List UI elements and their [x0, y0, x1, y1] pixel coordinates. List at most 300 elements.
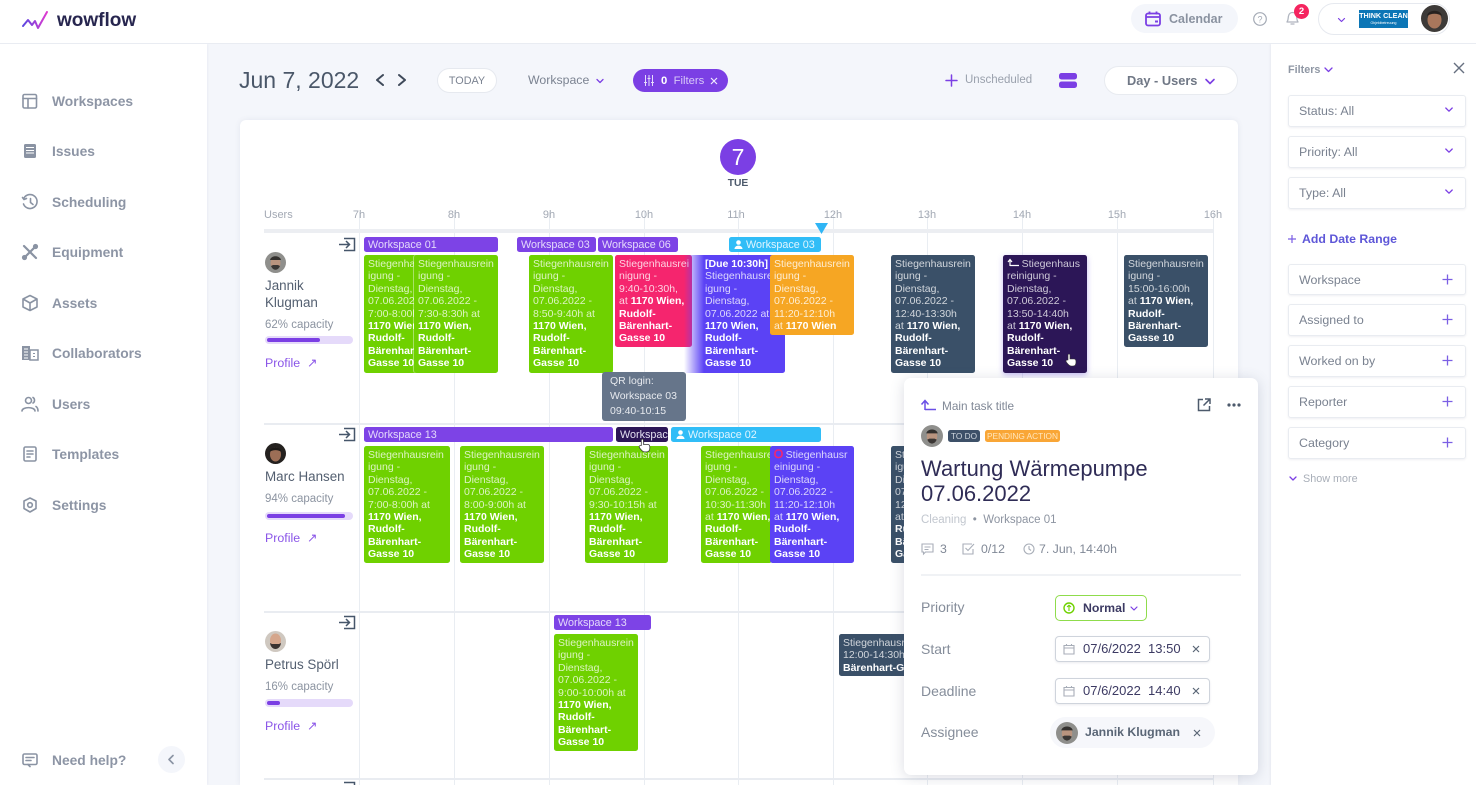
task: blue due 10:30: Rudolf- — [705, 332, 742, 344]
nav item: Settings — [23, 497, 106, 513]
task: green 8:00: Stiegenhausrein — [464, 449, 540, 461]
task: pink 9:40 — [615, 255, 692, 347]
capacity: 62% capacity — [265, 319, 333, 331]
icon: parent task — [920, 399, 936, 411]
filter: category: Category — [1299, 436, 1349, 450]
tag: Workspace 01: Workspace 01 — [368, 239, 437, 251]
icon: sliders — [644, 75, 654, 86]
icon: plus — [945, 74, 958, 87]
task: selected 13:50: at 1170 Wien, — [1007, 320, 1072, 332]
nav item: Assets — [22, 294, 97, 312]
task: slate 12:40: igung - — [895, 270, 927, 282]
nav item: Collaborators: Collaborators — [52, 346, 142, 361]
task: green 10:30: igung - — [705, 461, 737, 473]
task title: Wartung Wärmepumpe — [921, 456, 1148, 481]
filter: reporter: Reporter — [1299, 395, 1347, 409]
panel: filters sidebar — [1271, 44, 1476, 785]
task: green 7:00: Stiegenhausrein — [368, 449, 444, 461]
task: blue 11:20: Bärenhart- — [774, 536, 827, 548]
icon: checklist — [962, 543, 975, 555]
capacity: 16% capacity — [265, 681, 333, 693]
icon: clear — [710, 78, 718, 84]
task: green 8:00: Bärenhart- — [464, 536, 517, 548]
collapse button — [158, 746, 185, 773]
priority selector: Normal — [1083, 601, 1125, 615]
icon: help — [1253, 12, 1267, 26]
icon: check in — [339, 428, 356, 442]
task: green 9:00: Gasse 10 — [558, 736, 604, 748]
capacity: 94% capacity — [265, 493, 333, 505]
user: Marc Hansen — [265, 443, 353, 545]
tag: Workspace 01 — [364, 237, 498, 252]
nav item: Templates — [23, 446, 119, 462]
sidebar navigation — [0, 44, 207, 785]
name: Klugman — [265, 295, 318, 310]
text: 8h — [448, 209, 460, 221]
company logo: Think Clean: THINK CLEAN — [1359, 11, 1408, 20]
task: slate 15:00: Gasse 10 — [1128, 332, 1174, 344]
view dropdown: Day - Users — [1104, 66, 1238, 95]
text: 13h — [918, 209, 936, 221]
icon: chevron — [1338, 18, 1346, 22]
nav item: Equipment — [22, 244, 124, 260]
filter: worked on by — [1288, 345, 1466, 377]
category and workspace: Cleaning • Workspace 01 — [921, 514, 1057, 526]
task: blue 11:20: 11:20-12:10h — [774, 499, 835, 511]
text: 16h — [1204, 209, 1222, 221]
avatar: account — [1421, 5, 1448, 32]
task: blue due 10:30: Stiegenhausrein — [705, 270, 781, 282]
show more link: Show more — [1303, 473, 1358, 485]
tag: Workspace 06 — [598, 237, 678, 252]
task: green 9:00: Rudolf- — [558, 711, 595, 723]
task: blue due 10:30: igung - — [705, 283, 737, 295]
task: orange 11:20: at 1170 Wien — [774, 320, 836, 332]
task: slate 12:40: Bärenhart- — [895, 345, 948, 357]
task: green 9:30: Rudolf- — [589, 523, 626, 535]
today button — [437, 68, 497, 93]
task: green 7:30: Rudolf- — [418, 332, 455, 344]
filter: worked on by: Worked on by — [1299, 354, 1375, 368]
task: orange 11:20: 11:20-12:10h — [774, 308, 835, 320]
task: slate 12:40: 12:40-13:30h — [895, 308, 957, 320]
task: orange 11:20: Dienstag, — [774, 283, 818, 295]
select: type: Type: All — [1299, 186, 1346, 200]
task: green 10:30: Dienstag, — [705, 474, 749, 486]
add date range link: Add Date Range — [1302, 232, 1397, 246]
assignee chip: Jannik Klugman — [1085, 725, 1180, 739]
capacity bar — [265, 699, 353, 707]
name: Jannik — [265, 278, 304, 293]
assignee chip — [1050, 717, 1215, 748]
avatar — [265, 443, 286, 464]
tag: Workspace 03 assigned — [729, 237, 821, 252]
filter: category — [1288, 427, 1466, 459]
account switcher — [1318, 3, 1450, 35]
column label: Users: Users — [264, 209, 293, 221]
task: green 7:00: Gasse 10 — [368, 548, 414, 560]
task: green 9:00: Bärenhart- — [558, 724, 611, 736]
task: green 7:00: Rudolf- — [368, 332, 405, 344]
top bar — [0, 0, 1476, 44]
task: slate 12:40: at 1170 Wien, — [895, 320, 960, 332]
parent task row — [920, 398, 1040, 414]
select: type — [1288, 177, 1466, 209]
task: green 8:50: 1170 Wien, — [533, 320, 587, 332]
task: green 8:50: Bärenhart- — [533, 345, 586, 357]
status: to do — [948, 430, 980, 442]
task: green 8:50: Stiegenhausrein — [533, 258, 609, 270]
task: green 9:30: Stiegenhausrein — [589, 449, 665, 461]
filters heading — [1288, 63, 1334, 77]
icon: hand cursor — [638, 438, 650, 452]
unscheduled button — [945, 74, 1032, 87]
filters heading: Filters — [1288, 64, 1320, 76]
task title: 07.06.2022 — [921, 481, 1031, 506]
task: green 10:30: at 1170 Wien, — [705, 511, 770, 523]
date navigation arrows — [376, 74, 406, 86]
task: green 9:30: Bärenhart- — [589, 536, 642, 548]
day number — [720, 139, 756, 175]
task: selected 13:50: reinigung - — [1007, 270, 1057, 282]
filter count: 0 Filters — [661, 75, 704, 87]
task: green 7:30: 07.06.2022 - — [418, 295, 477, 307]
icon: more — [1227, 403, 1241, 407]
task: slate 15:00: Rudolf- — [1128, 308, 1165, 320]
task: green 7:00: Rudolf- — [368, 523, 405, 535]
task: green 9:00 — [554, 634, 638, 751]
task: selected 13:50: Stiegenhaus — [1022, 258, 1080, 270]
task: green 7:00 — [364, 446, 450, 563]
task: green 7:00: igung - — [368, 461, 400, 473]
text: 10h — [635, 209, 653, 221]
icon: calendar — [1145, 12, 1161, 26]
task: green 8:00: Gasse 10 — [464, 548, 510, 560]
task: green 8:00 — [460, 446, 544, 563]
task: green 8:00: igung - — [464, 461, 496, 473]
task: green 9:30: 07.06.2022 - — [589, 486, 648, 498]
task: selected 13:50 — [1003, 255, 1087, 373]
icon: row view toggle — [1059, 73, 1077, 88]
task: blue 11:20: Gasse 10 — [774, 548, 820, 560]
task: blue due 10:30: Gasse 10 — [705, 357, 751, 369]
task: green 10:30: Gasse 10 — [705, 548, 751, 560]
task: green 9:30: igung - — [589, 461, 621, 473]
select: status — [1288, 95, 1466, 127]
panel: task detail popup — [904, 378, 1258, 775]
task: slate 12:40: Stiegenhausrein — [895, 258, 971, 270]
task: blue 11:20: Stiegenhausr — [786, 449, 848, 461]
nav item: Issues: Issues — [52, 144, 95, 159]
select: priority — [1288, 136, 1466, 168]
task: pink 9:40: nigung - — [619, 270, 657, 282]
icon: help: ? — [1257, 14, 1263, 24]
deadline date field — [1055, 678, 1210, 704]
nav item: Assets: Assets — [52, 296, 97, 311]
task: blue due 10:30: [Due 10:30h] — [705, 258, 768, 270]
parent task row: Main task title — [942, 399, 1014, 413]
tag: Workspace 13: Workspace 13 — [558, 617, 627, 629]
task: green 8:00: 8:00-9:00h at — [464, 499, 526, 511]
due date: 7. Jun, 14:40h — [1039, 542, 1117, 556]
nav item: Scheduling — [22, 194, 126, 210]
status: to do: TO DO — [951, 431, 977, 441]
workspace dropdown: Workspace — [528, 73, 589, 87]
task: blue 11:20: at 1170 Wien, — [774, 511, 839, 523]
row: Marc Hansen — [265, 427, 911, 563]
task: blue due 10:30: Bärenhart- — [705, 345, 758, 357]
task: green 10:30: Bärenhart- — [705, 536, 758, 548]
priority selector — [1055, 595, 1147, 621]
task: green 9:00: Stiegenhausrein — [558, 637, 634, 649]
task: pink 9:40: 9:40-10:30h, — [619, 283, 678, 295]
filter: assigned to: Assigned to — [1299, 313, 1364, 327]
user: Petrus Spörl — [260, 631, 355, 741]
name: Petrus Spörl — [265, 657, 339, 672]
task: slate 12:40: Dienstag, — [895, 283, 939, 295]
tooltip: QR login: 09:40-10:15 — [610, 405, 666, 417]
tag: Workspace 03: Workspace 03 — [521, 239, 590, 251]
avatar — [265, 252, 286, 273]
task: selected 13:50: Gasse 10 — [1007, 357, 1053, 369]
task: pink 9:40: Stiegenhausrei — [619, 258, 689, 270]
capacity bar — [265, 336, 353, 344]
badge: 2 — [1294, 4, 1309, 19]
task: green 10:30: Rudolf- — [705, 523, 742, 535]
task: green 8:00: 07.06.2022 - — [464, 486, 523, 498]
task: pink 9:40: Gasse 10 — [619, 332, 665, 344]
task: blue 11:20: 07.06.2022 - — [774, 486, 833, 498]
icon: notifications bell with badge — [1286, 4, 1309, 25]
task: blue due 10:30: 07.06.2022 at — [705, 308, 769, 320]
tag: Workspace 13 — [554, 615, 651, 630]
task: green 7:00 — [364, 255, 418, 373]
task: green 7:00: Dienstag, — [368, 283, 412, 295]
text: 11h — [727, 209, 745, 221]
calendar label: Calendar — [1169, 12, 1222, 26]
nav item: Users: Users — [52, 397, 90, 412]
nav item: Scheduling: Scheduling — [52, 195, 126, 210]
capacity bar — [265, 512, 353, 520]
task: slate 12:40: Gasse 10 — [895, 357, 941, 369]
task: slate 15:00: at 1170 Wien, — [1128, 295, 1193, 307]
label: deadline: Deadline — [921, 683, 976, 699]
row: Jannik Klugman — [265, 237, 1208, 421]
company logo: Think Clean: Objektbetreuung — [1371, 21, 1396, 25]
text: 7h — [353, 209, 365, 221]
avatar — [265, 631, 286, 652]
tag: Workspace 03 assigned: Workspace 03 — [746, 239, 815, 251]
task: selected 13:50: Rudolf- — [1007, 332, 1044, 344]
current time marker — [815, 223, 828, 234]
task: green 8:00: 1170 Wien, — [464, 511, 518, 523]
tag: Workspace 03 — [517, 237, 596, 252]
task: slate 12:00: 12:00-14:30h — [843, 649, 905, 661]
task: pink 9:40: Rudolf- — [619, 308, 656, 320]
task: green 7:00: igung - — [368, 270, 400, 282]
icon: logo mark — [22, 11, 48, 29]
task: green 7:30: igung - — [418, 270, 450, 282]
task: green 7:00: 7:00-8:00h at — [368, 499, 430, 511]
task: green 8:50: Gasse 10 — [533, 357, 579, 369]
filter: workspace — [1288, 264, 1466, 295]
start date field: 07/6/2022 13:50 — [1083, 641, 1181, 656]
icon: check in — [339, 238, 356, 252]
nav item: Templates: Templates — [52, 447, 119, 462]
task: blue due 10:30 — [684, 255, 785, 373]
label: start: Start — [921, 641, 951, 657]
task: green 9:30 — [585, 446, 668, 563]
checklist count: 0/12 — [981, 542, 1005, 556]
text: 15h — [1108, 209, 1126, 221]
task: slate 12:40: Rudolf- — [895, 332, 932, 344]
task: green 8:50 — [529, 255, 613, 373]
task: green 7:30: 1170 Wien, — [418, 320, 472, 332]
task: green 8:50: 8:50-9:40h at — [533, 308, 595, 320]
tooltip: QR login: Workspace 03 — [610, 390, 677, 402]
task: green 7:30: 7:30-8:30h at — [418, 308, 480, 320]
task: pink 9:40: at 1170 Wien, — [619, 295, 684, 307]
filter: assigned to — [1288, 304, 1466, 336]
task: slate behind popup — [891, 446, 911, 563]
filter: workspace: Workspace — [1299, 273, 1361, 287]
label: assignee: Assignee — [921, 724, 979, 740]
icon: open external — [1197, 398, 1211, 412]
task: green 9:30: Gasse 10 — [589, 548, 635, 560]
task metadata — [921, 541, 1161, 557]
calendar button — [1131, 4, 1238, 33]
status: pending action: PENDING ACTION — [987, 431, 1058, 441]
tooltip: QR login: QR login: — [610, 375, 654, 387]
nav item: Users — [21, 396, 90, 412]
nav item: Settings: Settings — [52, 498, 106, 513]
row: Petrus Spörl — [265, 615, 907, 751]
avatar: assignee — [921, 425, 943, 447]
task: green 7:30: Gasse 10 — [418, 357, 464, 369]
task: green 7:00: 07.06.2022 - — [368, 486, 427, 498]
filters pill — [633, 69, 728, 92]
weekday: TUE — [728, 178, 748, 189]
icon: close filters — [1453, 62, 1465, 74]
icon: clock — [1023, 543, 1035, 555]
task: green 9:00: igung - — [558, 649, 590, 661]
nav item: Issues — [24, 144, 95, 159]
profile link: Profile ↗ — [265, 531, 317, 545]
task: blue 11:20: einigung - — [774, 461, 820, 473]
profile link: Profile ↗ — [265, 356, 317, 370]
company logo: Think Clean — [1359, 10, 1408, 28]
name: Marc Hansen — [265, 469, 345, 484]
task: green 10:30 — [701, 446, 772, 563]
task: orange 11:20: Stiegenhausrein — [774, 258, 850, 270]
tag: Workspace 06: Workspace 06 — [602, 239, 671, 251]
filter: reporter — [1288, 386, 1466, 418]
task: slate 12:40: 07.06.2022 - — [895, 295, 954, 307]
profile link: Profile ↗ — [265, 719, 317, 733]
task: green 7:30: Bärenhart- — [418, 345, 471, 357]
task title — [921, 456, 1148, 506]
task: orange 11:20: 07.06.2022 - — [774, 295, 833, 307]
view dropdown: Day - Users: Day - Users — [1127, 73, 1197, 88]
text: 12h — [824, 209, 842, 221]
task: selected 13:50: 13:50-14:40h — [1007, 308, 1069, 320]
task: blue 11:20 — [770, 446, 854, 563]
task: green 8:00: Rudolf- — [464, 523, 501, 535]
task: green 10:30: 10:30-11:30h — [705, 499, 766, 511]
select: priority: Priority: All — [1299, 145, 1358, 159]
label: priority: Priority — [921, 599, 965, 615]
task: green 7:00: Dienstag, — [368, 474, 412, 486]
task: green 7:00: Bärenhart- — [368, 536, 421, 548]
task: green 7:30: Stiegenhausrein — [418, 258, 494, 270]
start date field — [1055, 636, 1210, 662]
task: green 10:30: 07.06.2022 - — [705, 486, 764, 498]
logo text: wowflow — [57, 10, 136, 31]
task: selected 13:50: Bärenhart- — [1007, 345, 1060, 357]
today button: TODAY — [449, 75, 485, 87]
user: Jannik Klugman — [265, 252, 353, 370]
icon: comments — [921, 543, 934, 555]
task: green 9:30: 1170 Wien, — [589, 511, 643, 523]
task: slate 15:00: igung - — [1128, 270, 1160, 282]
task: blue 11:20: Dienstag, — [774, 474, 818, 486]
task: green 9:00: 1170 Wien, — [558, 699, 612, 711]
task: green 7:00: 1170 Wien, — [368, 511, 422, 523]
show more link — [1289, 472, 1359, 486]
icon: check in — [338, 615, 356, 630]
logo: wowflow — [22, 10, 136, 31]
task: green 8:50: 07.06.2022 - — [533, 295, 592, 307]
task: green 7:30: Dienstag, — [418, 283, 462, 295]
select: status: Status: All — [1299, 104, 1354, 118]
unscheduled label: Unscheduled — [965, 74, 1032, 86]
tooltip: QR login — [602, 372, 686, 421]
tag: Workspace 02: Workspace 02 — [688, 429, 757, 441]
task: pink 9:40: Bärenhart- — [619, 320, 672, 332]
task: selected 13:50: 07.06.2022 - — [1007, 295, 1066, 307]
nav item: Equipment: Equipment — [52, 245, 123, 260]
task: slate 15:00: Bärenhart- — [1128, 320, 1181, 332]
task: blue due 10:30: Dienstag, — [705, 295, 749, 307]
text: 9h — [543, 209, 555, 221]
name — [265, 278, 318, 310]
tag: Workspace 13: Workspace 13 — [368, 429, 437, 441]
task: green 9:30: Dienstag, — [589, 474, 633, 486]
task: green 7:00: Gasse 10 — [368, 357, 414, 369]
panel: calendar — [240, 120, 1238, 785]
task: orange 11:20 — [770, 255, 854, 335]
icon: bell — [1286, 12, 1299, 25]
icon: next row check in — [338, 781, 356, 785]
task: green 8:00: Dienstag, — [464, 474, 508, 486]
task: slate 15:00 — [1124, 255, 1208, 347]
task: orange 11:20: igung - — [774, 270, 806, 282]
task: slate 12:00 — [839, 634, 907, 676]
heading: date: Jun 7, 2022 — [239, 67, 359, 93]
task: selected 13:50: Dienstag, — [1007, 283, 1051, 295]
task: green 8:50: Dienstag, — [533, 283, 577, 295]
comment count: 3 — [940, 542, 947, 556]
nav item: Workspaces: Workspaces — [52, 94, 133, 109]
tag: Workspace 02 — [671, 427, 821, 442]
task: green 7:30 — [414, 255, 498, 373]
task: green 9:00: Dienstag, — [558, 662, 602, 674]
task: green 9:00: 07.06.2022 - — [558, 674, 617, 686]
task: green 9:00: 9:00-10:00h at — [558, 687, 626, 699]
tag: Workspace 13 — [364, 427, 613, 442]
badge: 2: 2 — [1299, 6, 1304, 17]
task: green 8:50: igung - — [533, 270, 565, 282]
